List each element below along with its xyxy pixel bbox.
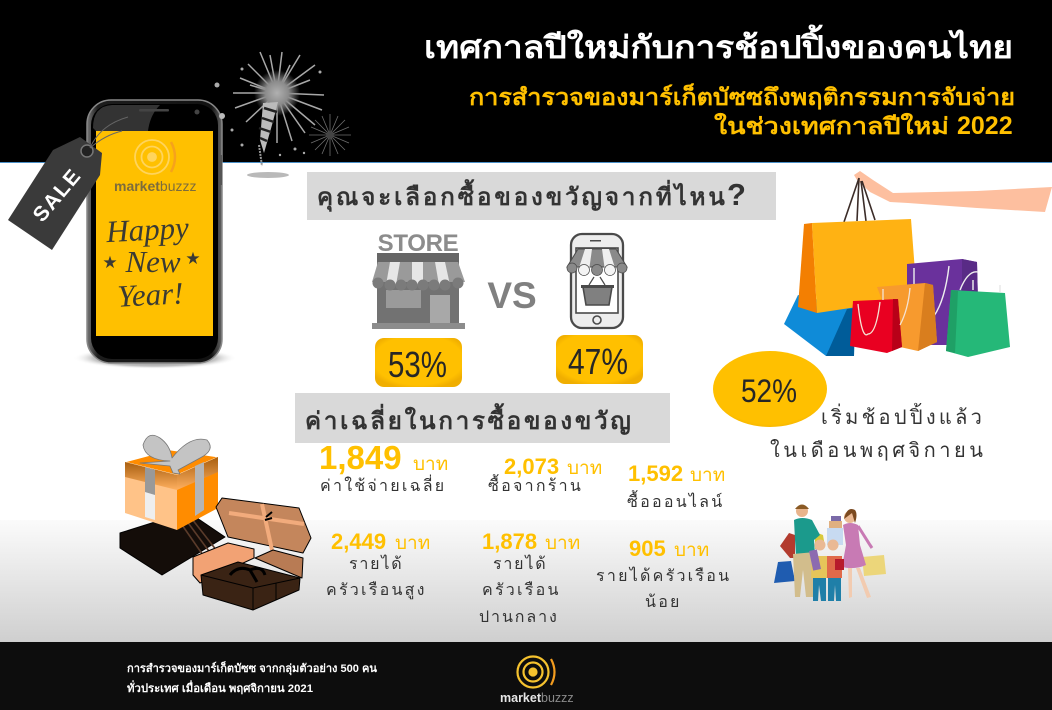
happy new year handwriting [102, 210, 201, 314]
stat: 2,073 in store: บาท [567, 458, 602, 479]
stat: 1,849 average: ค่าใช้จ่ายเฉลี่ย [320, 474, 446, 495]
peach box [193, 543, 254, 583]
stat: 2,073 in store [488, 454, 602, 495]
stat: 2,449 high income: ครัวเรือนสูง [326, 581, 427, 600]
subtitle: ในช่วงเทศกาลปีใหม่ [714, 112, 949, 139]
stat: 1,592 online: ซื้อออนไลน์ [627, 490, 724, 511]
icon: smartphone [73, 100, 237, 369]
subtitle: การสำรวจของมาร์เก็ตบัซซถึงพฤติกรรมการจับจ่าย [469, 82, 1015, 110]
black box [120, 518, 225, 575]
dark box [201, 562, 300, 610]
woman [842, 523, 866, 568]
badge: 47%: 47% [568, 341, 628, 382]
woman's bag [862, 555, 886, 576]
footer logo: marketbuzzz [500, 691, 574, 705]
gift stack [827, 528, 843, 545]
icon: mobile shop [567, 234, 627, 328]
footer band [0, 642, 1052, 710]
children [811, 556, 827, 578]
stat: 2,449 high income: บาท [395, 533, 430, 554]
happy new year handwriting: ★ [102, 253, 118, 272]
stat: 1,849 average: 1,849 [319, 439, 402, 476]
lower page gradient band [0, 520, 1052, 642]
badge: 52% [713, 351, 827, 427]
man [794, 518, 820, 555]
heading bar: where to buy [307, 172, 776, 220]
footer note [127, 661, 377, 695]
stat: 1,592 online: บาท [690, 465, 725, 486]
happy new year handwriting: ★ [185, 249, 201, 268]
stat: 2,449 high income [326, 529, 430, 600]
stat: 2,073 in store: ซื้อจากร้าน [488, 474, 583, 495]
badge: 52%: 52% [741, 373, 797, 409]
happy new year handwriting: New [124, 244, 181, 279]
illustration: hand with shopping bags [784, 171, 1052, 357]
stat: 2,073 in store: 2,073 [504, 454, 559, 479]
happy new year handwriting: Year! [117, 275, 184, 314]
stat: 1,849 average [319, 439, 448, 495]
subtitle [469, 82, 1015, 140]
stat: 1,878 middle income: รายได้ [493, 554, 547, 573]
icon: store [372, 230, 465, 329]
heading bar: average spend: ค่าเฉลี่ยในการซื้อของขวัญ [305, 402, 634, 435]
footer logo [500, 656, 574, 705]
footer note: การสำรวจของมาร์เก็ตบัซซ จากกลุ่มตัวอย่าง 500 คน [127, 661, 377, 676]
illustration: shopping family [774, 504, 886, 601]
badge: 47% [556, 335, 643, 384]
stat: 1,592 online [627, 461, 725, 511]
stat: 905 low income: รายได้ครัวเรือน [596, 566, 731, 585]
stat: 1,849 average: บาท [413, 454, 448, 475]
badge: 53%: 53% [388, 344, 447, 385]
stat: 1,878 middle income: 1,878 [482, 529, 537, 554]
stat: 2,449 high income: รายได้ [349, 554, 403, 573]
icon: store: STORE [378, 230, 459, 257]
stat: 1,592 online: 1,592 [628, 461, 683, 486]
tan box [255, 550, 303, 578]
header band [0, 0, 1052, 163]
stat: 1,878 middle income: บาท [545, 533, 580, 554]
sale tag: SALE [29, 164, 86, 226]
stat: 1,878 middle income: ครัวเรือน [482, 581, 561, 599]
happy new year handwriting: Happy [104, 210, 190, 249]
stat: 1,878 middle income [479, 529, 580, 626]
subtitle: 2022 [957, 112, 1013, 140]
text: started shopping in November: ในเดือนพฤศจิกายน [770, 439, 986, 462]
text: started shopping in November: เริ่มช้อปปิ้งแล้ว [821, 403, 985, 429]
icon: fireworks [214, 52, 351, 178]
heading bar: average spend [295, 393, 670, 443]
footer note: ทั่วประเทศ เมื่อเดือน พฤศจิกายน 2021 [127, 680, 313, 695]
heading bar: where to buy: คุณจะเลือกซื้อของขวัญจากที่ไหน [317, 178, 728, 213]
logo text on phone: marketbuzzz [114, 178, 196, 194]
title: เทศกาลปีใหม่กับการช้อปปิ้งของคนไทย [424, 24, 1013, 65]
sale tag [8, 117, 128, 250]
stat: 905 low income: บาท [674, 540, 709, 561]
orange gift [125, 450, 218, 475]
stat: 905 low income: น้อย [645, 593, 682, 611]
brown box [216, 498, 311, 553]
phone screen [96, 131, 213, 336]
illustration: gift boxes [120, 435, 311, 610]
stat: 905 low income [596, 536, 731, 611]
logo on phone [135, 140, 175, 174]
heading bar: where to buy: ? [727, 177, 746, 212]
text: started shopping in November [770, 403, 986, 462]
stat: 1,878 middle income: ปานกลาง [479, 609, 559, 626]
vs label: VS [487, 275, 537, 316]
man's bags [780, 533, 795, 558]
stat: 905 low income: 905 [629, 536, 666, 561]
stat: 2,449 high income: 2,449 [331, 529, 386, 554]
badge: 53% [375, 338, 462, 387]
